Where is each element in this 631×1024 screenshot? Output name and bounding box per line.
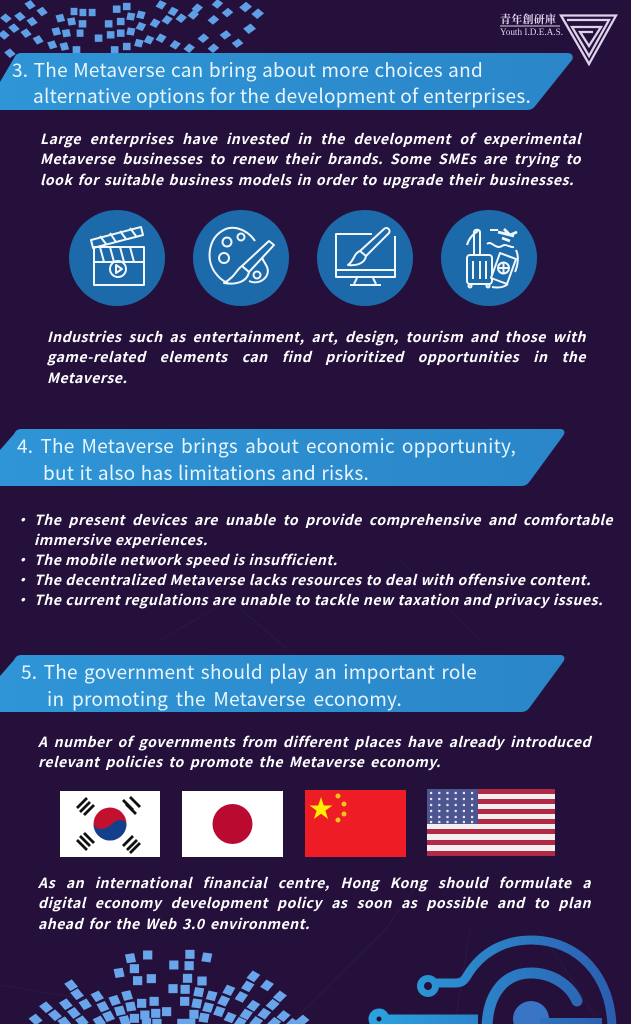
circuit graphic — [372, 940, 612, 1024]
industries text: Industries such as entertainment, art, design, tourism and those with — [47, 327, 586, 347]
intro text section 3 — [40, 129, 582, 190]
Hong Kong text: digital economy development policy as soon as possible and to plan — [38, 893, 591, 913]
icon: monitor with brush — [317, 210, 413, 306]
heading 3: alternative options for the development of enterprises. — [33, 82, 531, 109]
icon: film clapperboard — [69, 210, 165, 306]
heading 4 — [17, 432, 516, 486]
industries text: Metaverse. — [47, 368, 127, 388]
intro text section 3: look for suitable business models in order to upgrade their businesses. — [40, 170, 574, 190]
bullet list: • — [15, 510, 30, 530]
banner 4 shape — [0, 429, 564, 486]
industries text: game-related elements can find prioritized opportunities in the — [47, 347, 586, 367]
bullet list: The current regulations are unable to tackle new taxation and privacy issues. — [34, 590, 603, 610]
bullet list: The decentralized Metaverse lacks resources to deal with offensive content. — [34, 570, 591, 590]
banner 5 shape — [0, 655, 564, 712]
heading 3 — [12, 56, 531, 109]
icon: paint palette and brush — [193, 210, 289, 306]
government policies text — [38, 732, 592, 772]
banner 3 shape — [0, 53, 573, 110]
bullet list — [15, 510, 614, 610]
heading 5: 5. The government should play an important role — [21, 658, 477, 685]
government policies text: A number of governments from different places have already introduced — [38, 732, 591, 752]
government policies text: relevant policies to promote the Metaverse economy. — [38, 752, 441, 772]
heading 4: 4. The Metaverse brings about economic opportunity, — [17, 432, 516, 459]
bullet list: The mobile network speed is insufficient. — [34, 550, 338, 570]
bullet list: The present devices are unable to provide comprehensive and comfortable — [34, 510, 613, 530]
heading 3: 3. The Metaverse can bring about more choices and — [12, 56, 483, 83]
top dot pattern — [0, 0, 263, 57]
intro text section 3: Metaverse businesses to renew their brands. Some SMEs are trying to — [40, 149, 581, 169]
icon: luggage and passport — [441, 210, 537, 306]
bullet list: • — [15, 570, 30, 590]
flag: United States — [427, 789, 555, 856]
Hong Kong text: As an international financial centre, Hong Kong should formulate a — [38, 873, 591, 893]
Hong Kong text: ahead for the Web 3.0 environment. — [38, 914, 310, 934]
logo: triangle mark — [561, 16, 616, 64]
industries text — [47, 327, 586, 388]
logo: organisation name: 青年創研庫 — [500, 12, 556, 26]
bottom dot pattern — [29, 950, 309, 1024]
Hong Kong text — [38, 873, 591, 934]
flag: Japan — [182, 791, 283, 857]
bullet list: • — [15, 550, 30, 570]
heading 5 — [21, 658, 477, 712]
flag: South Korea — [60, 791, 160, 857]
flag: China — [305, 790, 406, 857]
heading 5: in promoting the Metaverse economy. — [47, 685, 402, 712]
intro text section 3: Large enterprises have invested in the development of experimental — [40, 129, 581, 149]
bullet list: • — [15, 590, 30, 610]
bullet list: immersive experiences. — [34, 530, 208, 550]
heading 4: but it also has limitations and risks. — [43, 459, 369, 486]
logo: organisation name: Youth I.D.E.A.S. — [500, 28, 563, 38]
logo: organisation name — [500, 12, 563, 38]
